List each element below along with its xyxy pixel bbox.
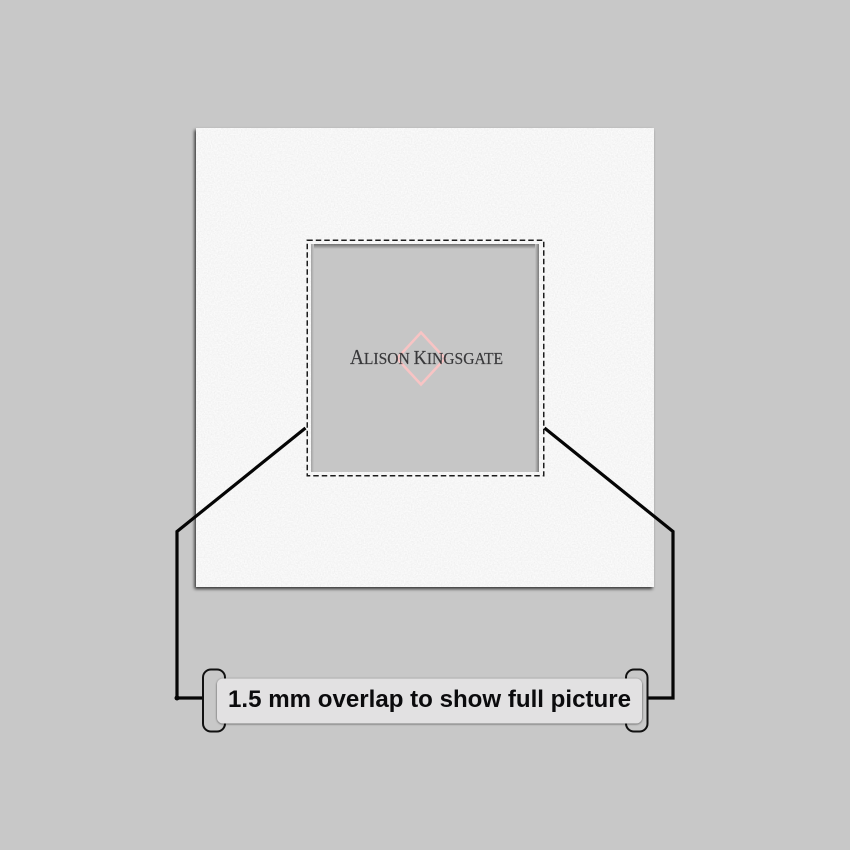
arrow: right connector line xyxy=(544,428,673,698)
dashed outline: full picture area xyxy=(307,240,544,476)
icon: pink diamond xyxy=(397,332,445,384)
panel: white mount board xyxy=(196,128,654,587)
callout: overlap label xyxy=(203,670,648,732)
right bracket tab xyxy=(626,670,648,732)
arrow: left connector line xyxy=(177,428,306,698)
icon: left connector end dot xyxy=(174,696,180,700)
logo: Alison Kingsgate watermark xyxy=(350,332,503,384)
panel: mount window opening xyxy=(311,244,539,472)
label plate xyxy=(217,678,642,724)
left bracket tab xyxy=(203,670,225,732)
logo text: ALISON KINGSGATE xyxy=(350,345,503,369)
label text: 1.5 mm overlap to show full picture xyxy=(228,686,631,713)
